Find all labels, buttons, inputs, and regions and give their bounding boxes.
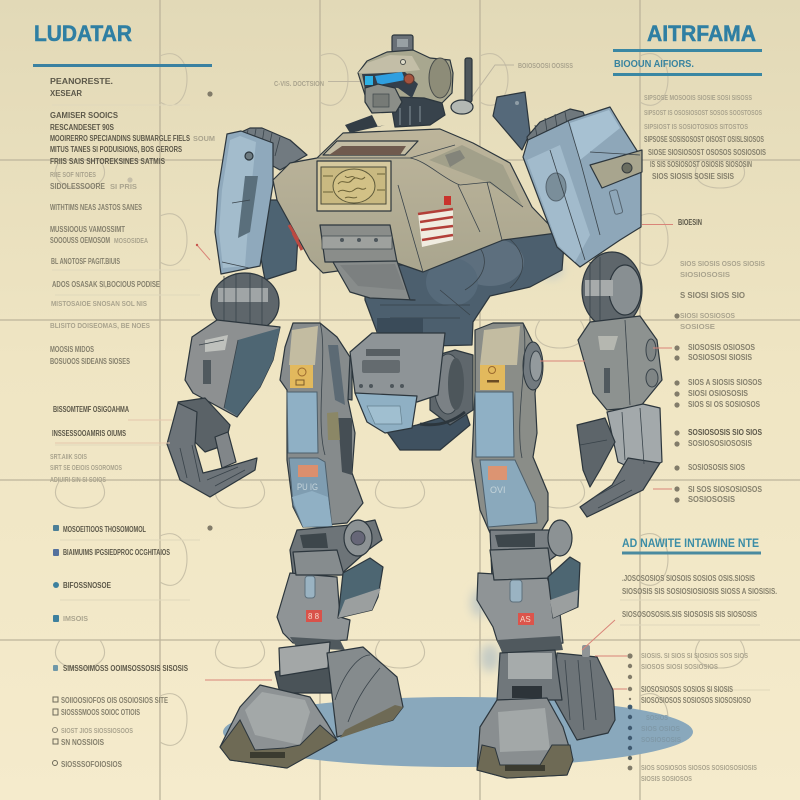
text block: section body: .JOSOSOSIOS SIOSOIS SOSIOS OSIS.SIOSIS — [622, 574, 756, 583]
legend item — [53, 708, 140, 717]
heading rule — [622, 552, 761, 554]
robot: right forearm — [578, 316, 662, 410]
text block: upper specs: FRIIS SAIS SHTOREKSINES SATMIS — [50, 157, 166, 166]
gold emblem plate — [317, 161, 391, 211]
text block: footnotes: SIOSOSIOSOS SOSIOSOS SIOSOSIOSO — [641, 696, 751, 705]
text block: footnotes: SIOSIS SOSIOSOS — [641, 774, 692, 783]
text block: right arm notes: SOSIOSOSIS SIOS — [688, 463, 746, 472]
text block: footnotes: SIOS OSIOS — [641, 726, 680, 733]
text block: footnotes: SOSIOS — [646, 715, 668, 722]
text block: right arm notes: SOSIOSOSIS SIO SIOS — [688, 428, 763, 437]
faint dot — [127, 177, 133, 183]
text block: middle specs: MISTOSAIOE SNOSAN SOL NIS — [51, 299, 147, 308]
text block: right arm notes: SIOS SI OS SOSIOSOS — [688, 400, 761, 409]
text block: upper specs: MOOIRERRO SPECIANDINS SUBMARGLE FIELS — [50, 134, 190, 143]
legend item — [53, 548, 170, 557]
text block: middle specs: BOSUOOS SIDEANS SIOSES — [50, 357, 130, 366]
text block: upper specs: SI PRIS — [110, 182, 137, 191]
callout labels on top: C-VIS. DOCTSION — [274, 79, 324, 88]
legend item: SIMSSOIMOSS OOIMSOSSOSIS SISOSIS — [63, 664, 189, 673]
legend item: SOIIOOSIOFOS OIS OSOIOSIOS SITE — [61, 696, 168, 705]
yellow pad right — [480, 365, 505, 390]
section heading: AD NAWITE INTAWINE NTE — [622, 538, 759, 550]
robot: right foot — [477, 645, 615, 778]
text block: section body: SIOSOSOSOSIS.SIS SIOSOSIS SIS SIOSOSIS — [622, 610, 758, 619]
text block: upper specs: WITHTIMS NEAS JASTOS SANES — [50, 203, 142, 212]
orange decal right — [488, 466, 507, 480]
callout labels on top — [274, 61, 573, 100]
panel: left column — [33, 21, 215, 769]
dot markers footnotes — [627, 653, 633, 770]
robot: right thigh — [472, 323, 548, 533]
robot — [167, 35, 662, 778]
title left: LUDATAR — [34, 21, 132, 46]
text block: right arm notes: S SIOSI SIOS SIO — [680, 291, 745, 300]
robot: right elbow — [582, 252, 642, 328]
text block: right arm notes: SIOS A SIOSIS SIOSOS — [688, 378, 763, 387]
legend item — [53, 525, 146, 534]
text block: right arm notes: SIOSI OSIOSOSIS — [688, 389, 749, 398]
red warning stripes left — [289, 225, 302, 250]
red warning stripes right — [418, 196, 453, 247]
text block: middle specs: INSSESSOOAMRIS OIUMS — [52, 429, 126, 438]
spec heading: PEANORESTE. — [50, 77, 113, 86]
text block: right specs: IS SIS SOSIOSOST OSIOSIS SIOSOSIN — [650, 160, 752, 169]
text block: right arm notes: SIOS SIOSIS OSOS SIOSIS — [680, 259, 765, 268]
robot: left forearm — [185, 320, 280, 417]
text block: right arm notes: SIOSI SOSIOSOS — [680, 311, 735, 320]
text block: upper specs: GAMISER SOOICS — [50, 111, 119, 120]
text block: middle specs: BLISITO DOISEOMAS, BE NOES — [50, 321, 150, 330]
robot: left thigh — [280, 323, 363, 527]
heading rule — [613, 49, 762, 52]
legend item: SIOSSSMOOS SOIOC OTIOIS — [61, 708, 140, 717]
legend item: SN NOSSIOIS — [61, 738, 105, 747]
robot: left calf — [277, 550, 383, 650]
text block: right specs — [644, 93, 766, 181]
robot: left thigh: PU IG — [297, 482, 318, 492]
red tag left — [306, 610, 322, 622]
robot: right shoulder — [523, 107, 642, 267]
text block: middle specs: SRT.AIIK SOIS — [50, 452, 87, 461]
text block: upper specs: BL ANOTOSF PAGIT.BIUIS — [51, 257, 120, 266]
legend item — [52, 726, 133, 735]
robot: left hand — [167, 398, 257, 497]
spec heading: XESEAR — [50, 89, 82, 98]
robot: left knee — [290, 520, 382, 575]
halo blotches — [471, 262, 563, 672]
ground shadow — [223, 697, 693, 767]
orange decal left — [298, 465, 318, 477]
text block: right arm notes — [680, 259, 765, 504]
robot: chest grill — [320, 225, 415, 300]
text block: right arm notes: SOSIOSOSIS — [688, 495, 736, 504]
robot: right hand — [577, 404, 662, 517]
robot: right calf — [477, 548, 580, 655]
text block: right arm notes: SOSIOSOSIOSOSIS — [688, 439, 753, 448]
text block: footnotes: SIOS SOSIOSOS SIOSOS SOSIOSOSIOSIS — [641, 763, 757, 772]
text block: middle specs: ADIUIRI SIN SI SOIOS — [50, 475, 106, 484]
text block: middle specs: BISSOMTEMF OSIGOAHMA — [53, 405, 129, 414]
panel: right column — [613, 21, 777, 783]
part label: BIOESIN — [678, 218, 702, 227]
text block: upper specs: SIDOLESSOORE — [50, 182, 106, 191]
red tag right — [518, 613, 534, 625]
text block: upper specs: SOOOUSS OEMOSOM — [50, 236, 110, 245]
robot: torso — [273, 129, 557, 273]
robot: left elbow — [211, 273, 279, 334]
text block: right specs: SIOS SIOSIS SOSIE SISIS — [652, 172, 735, 181]
legend item: MOSOEITIOOS THOSOMOMOL — [63, 525, 146, 534]
robot: right thigh: OVI — [490, 485, 506, 495]
robot: left foot — [220, 642, 403, 768]
text block: footnotes: SIOSIS. SI SIOS SI SIOSIOS SOS SIOS — [641, 651, 748, 660]
text block: upper specs: RIIE SOF NITOES — [50, 170, 96, 179]
robot: neck — [345, 95, 445, 133]
title right: AITRFAMA — [647, 21, 756, 46]
legend item: SIOST JIOS SIOSSIOSOOS — [61, 726, 133, 735]
text block: upper specs: SOUM — [193, 134, 215, 143]
dot markers arm — [674, 313, 680, 503]
torso vent — [323, 141, 418, 155]
text block: right arm notes: SIOSIOSOSIS — [680, 270, 730, 279]
text block: middle specs: MOOSIS MIDOS — [50, 345, 94, 354]
text block: upper specs: MOSOSIDEA — [114, 236, 148, 245]
text block: footnotes — [641, 651, 757, 783]
robot: left calf: 8 8 — [308, 612, 320, 621]
text block: upper specs — [50, 111, 215, 289]
legend item — [53, 614, 88, 623]
robot: head — [358, 35, 453, 113]
legend item: SIOSSSOFOIOSIOS — [61, 760, 123, 769]
robot: pelvis — [330, 333, 473, 450]
robot: right knee — [490, 520, 572, 580]
red leader lines — [55, 224, 673, 689]
text block: footnotes: SIOSOSIOSOS SOSIOS SI SIOSIS — [641, 685, 733, 694]
marker dot — [207, 525, 213, 531]
text block: footnotes: SOSIOSOSIS — [641, 737, 681, 744]
text block: right arm notes: SOSIOSOSI SIOSIS — [688, 353, 753, 362]
text block: right specs: SIPSOSE MOSOOIS SIOSIE SOSI SISOSS — [644, 93, 752, 102]
text block: middle specs — [50, 299, 150, 484]
robot: back plate and antenna — [451, 58, 530, 150]
text block: middle specs: SIRT SE OEIOIS OSOROMOS — [50, 463, 122, 472]
text block: right specs: SIPSIOST IS SOSIOTOSIOS SITOSTOS — [644, 122, 748, 131]
callout labels on top: BOIOSOOSI OOSISS — [518, 61, 573, 70]
text block: upper specs: MUSSIOOUS VAMOSSIMT — [50, 225, 125, 234]
text block: section body — [622, 574, 777, 619]
text block: right arm notes: SOSIOSE — [680, 322, 715, 331]
text block: right arm notes: SIOSOSIS OSIOSOS — [688, 343, 756, 352]
yellow pad left — [290, 365, 313, 388]
legend item: BIFOSSNOSOE — [63, 581, 112, 590]
text block: upper specs: MITUS TANES SI PODUISIONS, BOS GERORS — [50, 145, 182, 154]
text block: footnotes: SIOSOS SIOSI SOSIOSIOS — [641, 662, 718, 671]
robot: right calf: AS — [520, 615, 531, 624]
spec heading — [50, 77, 113, 98]
heading rule — [613, 73, 762, 76]
legend item: IMSOIS — [63, 614, 88, 623]
text block: right arm notes: SI SOS SIOSOSIOSOS — [688, 485, 763, 494]
robot: belly machinery — [365, 222, 565, 346]
text block: upper specs: RESCANDESET 90S — [50, 123, 115, 132]
text block: upper specs: ADOS OSASAK SI,BOCIOUS PODISE — [52, 280, 161, 289]
marker dot — [207, 91, 213, 97]
heading rule — [33, 64, 212, 67]
robot: left shoulder and upper arm — [215, 128, 307, 280]
subheading: BIOOUN AIFIORS. — [614, 59, 694, 70]
legend list — [52, 525, 189, 769]
legend item: BIAIMUIMS IPGSIEDPROC OCGHITAIOS — [63, 548, 170, 557]
